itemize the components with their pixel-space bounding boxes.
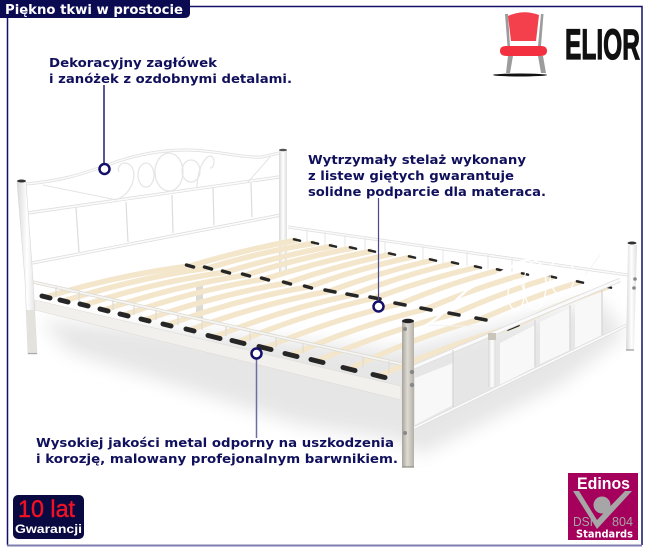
title banner: Piękno tkwi w prostocie xyxy=(5,3,183,18)
center support rail xyxy=(196,282,203,318)
callout text: Dekoracyjny zagłówek xyxy=(49,55,218,70)
slat end caps xyxy=(42,239,611,378)
logo: Elior xyxy=(493,12,640,77)
illustration: white metal bed frame xyxy=(17,149,637,467)
badge: 10 years warranty xyxy=(13,495,84,539)
callout: metal xyxy=(36,348,398,466)
far side rail xyxy=(288,227,628,275)
badge: 10 years warranty: 10 lat xyxy=(18,496,75,523)
badge: Edinos standards xyxy=(568,473,638,540)
badge: Edinos standards: 804 xyxy=(612,514,633,529)
headboard xyxy=(26,149,287,275)
callout text: z listew giętych gwarantuje xyxy=(308,168,514,183)
bed slats xyxy=(46,240,608,376)
center support leg xyxy=(488,333,496,387)
footboard xyxy=(414,247,627,428)
icon: red chair xyxy=(493,12,547,77)
badge: 10 years warranty: Gwarancji xyxy=(15,522,82,536)
callout pointer xyxy=(100,85,110,174)
callout pointer xyxy=(252,348,262,438)
callout: headboard xyxy=(49,55,292,174)
callout text: Wysokiej jakości metal odporny na uszkodzenia xyxy=(36,435,394,450)
front side rail xyxy=(33,282,401,400)
callout text: i korozję, malowany profejonalnym barwnikiem. xyxy=(36,451,398,466)
callout text: Wytrzymały stelaż wykonany xyxy=(308,152,526,167)
callout: slats xyxy=(308,152,546,312)
floor shadow xyxy=(40,300,625,455)
front corner post xyxy=(402,319,414,467)
callout text: solidne podparcie dla materaca. xyxy=(308,184,546,199)
left headboard post xyxy=(17,180,37,354)
callout text: i zanóżek z ozdobnymi detalami. xyxy=(49,71,292,86)
badge: Edinos standards: Standards xyxy=(576,528,633,540)
callout pointer xyxy=(374,198,384,312)
badge: Edinos standards: DSI xyxy=(573,514,593,529)
badge: Edinos standards: Edinos xyxy=(577,474,630,493)
right rear post xyxy=(626,242,637,350)
